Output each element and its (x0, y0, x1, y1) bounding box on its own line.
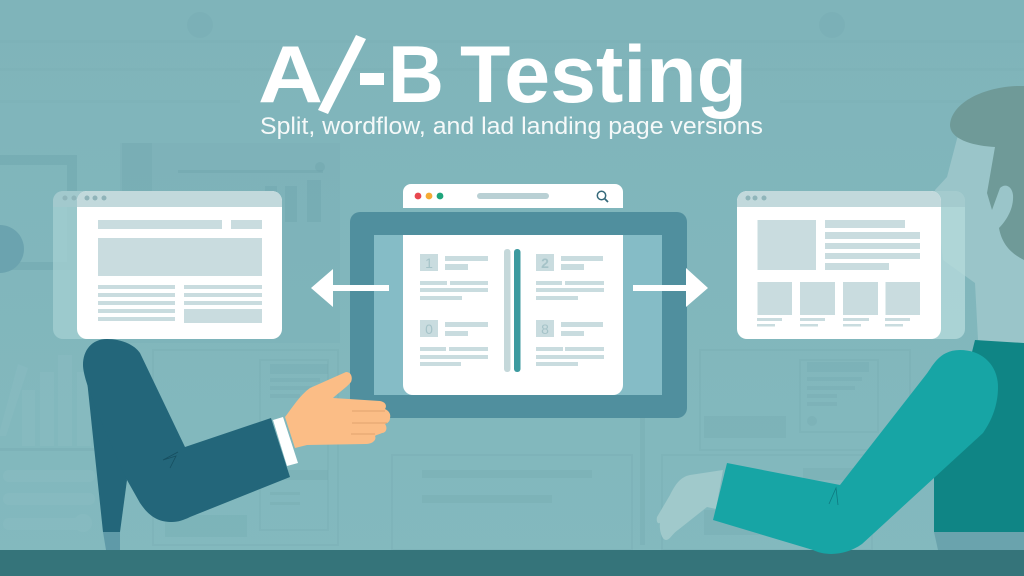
person: shirt (934, 340, 1024, 550)
content blocks: 2 (541, 255, 549, 271)
split divider (504, 249, 520, 372)
content blocks (420, 254, 604, 366)
content blocks: 8 (541, 321, 549, 337)
title: A (258, 30, 323, 120)
center tablet (350, 212, 687, 418)
arrow: right (633, 268, 708, 307)
right arm with sleeve (713, 350, 998, 554)
right browser window variant B (737, 191, 965, 339)
center browser bar (403, 184, 623, 208)
cuff (273, 417, 298, 466)
content blocks: 1 (425, 255, 433, 271)
title: Testing (460, 30, 747, 120)
right hand (657, 470, 723, 540)
left arm with suit (83, 339, 390, 550)
bottom bar (0, 550, 1024, 576)
hand (285, 372, 390, 448)
content blocks: 0 (425, 321, 433, 337)
title: B (388, 30, 444, 120)
left browser window variant A (53, 191, 282, 339)
arrow: left (311, 269, 389, 307)
center landing page (403, 235, 623, 395)
title (258, 30, 747, 120)
subtitle: Split, wordflow, and lad landing page versions (260, 113, 763, 140)
person: head (935, 86, 1024, 345)
